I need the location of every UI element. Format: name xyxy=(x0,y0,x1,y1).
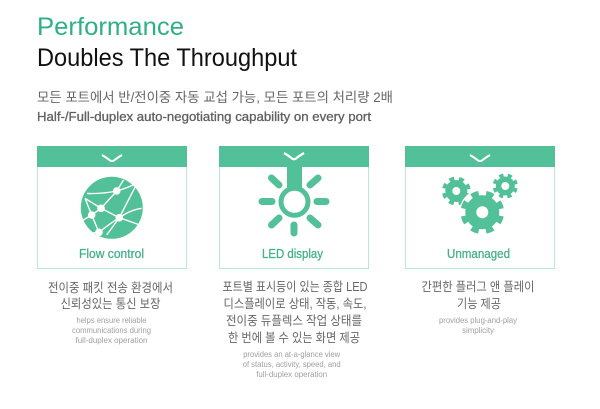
icon: chevron xyxy=(102,155,122,161)
text block: unmanaged: simplicity xyxy=(462,326,494,335)
text block: LED display: 디스플레이로 상태, 작동, 속도, xyxy=(224,297,366,311)
subtitle: Half-/Full-duplex auto-negotiating capability on every port xyxy=(37,109,371,124)
text block: flow control: communications during xyxy=(72,326,151,335)
title: Doubles The Throughput xyxy=(37,44,297,72)
title: Performance xyxy=(37,13,184,41)
label: Unmanaged xyxy=(447,246,510,261)
text block: LED display: 전이중 듀플렉스 작업 상태를 xyxy=(226,314,362,328)
text block: LED display: of status, activity, speed, and xyxy=(243,360,341,369)
subtitle xyxy=(37,90,393,124)
label: Flow control xyxy=(79,246,144,261)
text block: LED display: 포트별 표시등이 있는 종합 LED xyxy=(222,280,368,294)
panel: flow control xyxy=(37,146,187,268)
panel: LED display xyxy=(219,146,369,268)
text block: flow control xyxy=(48,281,173,345)
text block: unmanaged: provides plug-and-play xyxy=(439,316,517,325)
text block: unmanaged: 간편한 플러그 앤 플레이 xyxy=(422,280,534,294)
icon: network globe xyxy=(81,177,143,239)
subtitle: 모든 포트에서 반/전이중 자동 교섭 가능, 모든 포트의 처리량 2배 xyxy=(37,90,393,105)
text block: flow control: helps ensure reliable xyxy=(76,316,147,325)
text block: unmanaged xyxy=(422,280,534,335)
text block: LED display: full-duplex operation xyxy=(256,370,327,379)
text block: LED display: 한 번에 볼 수 있는 화면 제공 xyxy=(228,331,360,345)
text block: unmanaged: 기능 제공 xyxy=(457,297,501,311)
text block: flow control: 신뢰성있는 통신 보장 xyxy=(60,297,161,311)
icon: LED bulb xyxy=(262,153,326,233)
text block: flow control: full-duplex operation xyxy=(76,336,148,345)
text block: LED display xyxy=(222,280,368,379)
icon: chevron xyxy=(470,155,490,161)
label: LED display xyxy=(262,246,323,261)
title xyxy=(37,13,297,72)
text block: LED display: provides an at-a-glance view xyxy=(243,350,340,359)
icon: gears xyxy=(442,173,518,235)
text block: flow control: 전이중 패킷 전송 환경에서 xyxy=(48,281,173,295)
panel: unmanaged xyxy=(405,146,555,268)
